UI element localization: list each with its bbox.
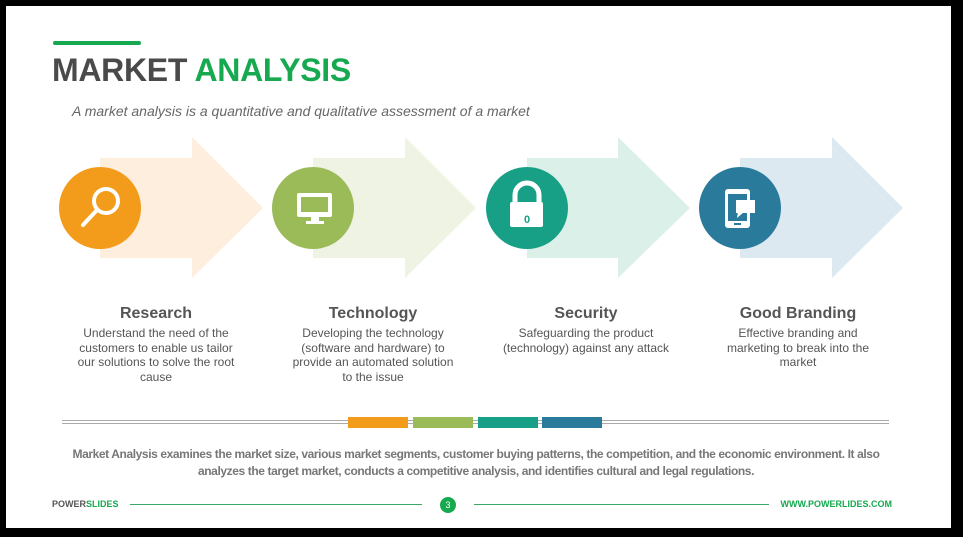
- step: branding: Effective branding and marketing to break into the market: [727, 326, 869, 369]
- icon: magnifier: [59, 167, 141, 249]
- title accent bar: [53, 41, 141, 45]
- arrow: branding: [740, 137, 903, 278]
- step: research: Understand the need of the customers to enable us tailor our solutions to solve the root cause: [78, 326, 234, 384]
- step: branding: Good Branding: [740, 305, 856, 322]
- footer: [52, 497, 892, 513]
- step: security: [503, 305, 669, 354]
- summary text: Market Analysis examines the market size, various market segments, customer buying patterns, the competition, and the economic environment. It also analyzes the target market, conducts a competitive analysis, and identifies cultural and legal regulations.: [72, 447, 880, 478]
- footer: POWERSLIDES: [52, 499, 119, 509]
- icon: padlock: 0: [524, 214, 530, 226]
- icon: phone chat: [699, 167, 781, 249]
- arrow: security: [527, 137, 690, 278]
- step: technology: Developing the technology (software and hardware) to provide an automated solution to the issue: [293, 326, 453, 384]
- step: security: Safeguarding the product (technology) against any attack: [503, 326, 669, 354]
- divider with color blocks: [62, 417, 889, 428]
- step: technology: Technology: [329, 305, 417, 322]
- arrow: research: [100, 137, 263, 278]
- footer: WWW.POWERLIDES.COM: [780, 499, 892, 509]
- title: MARKET ANALYSIS: [52, 52, 351, 88]
- icon: padlock: [486, 167, 568, 249]
- footer: 3: [445, 500, 450, 510]
- arrow: technology: [313, 137, 476, 278]
- step: security: Security: [554, 305, 618, 322]
- step: research: Research: [120, 305, 192, 322]
- subtitle: A market analysis is a quantitative and qualitative assessment of a market: [72, 103, 530, 119]
- step: branding: [727, 305, 869, 369]
- icon: monitor: [272, 167, 354, 249]
